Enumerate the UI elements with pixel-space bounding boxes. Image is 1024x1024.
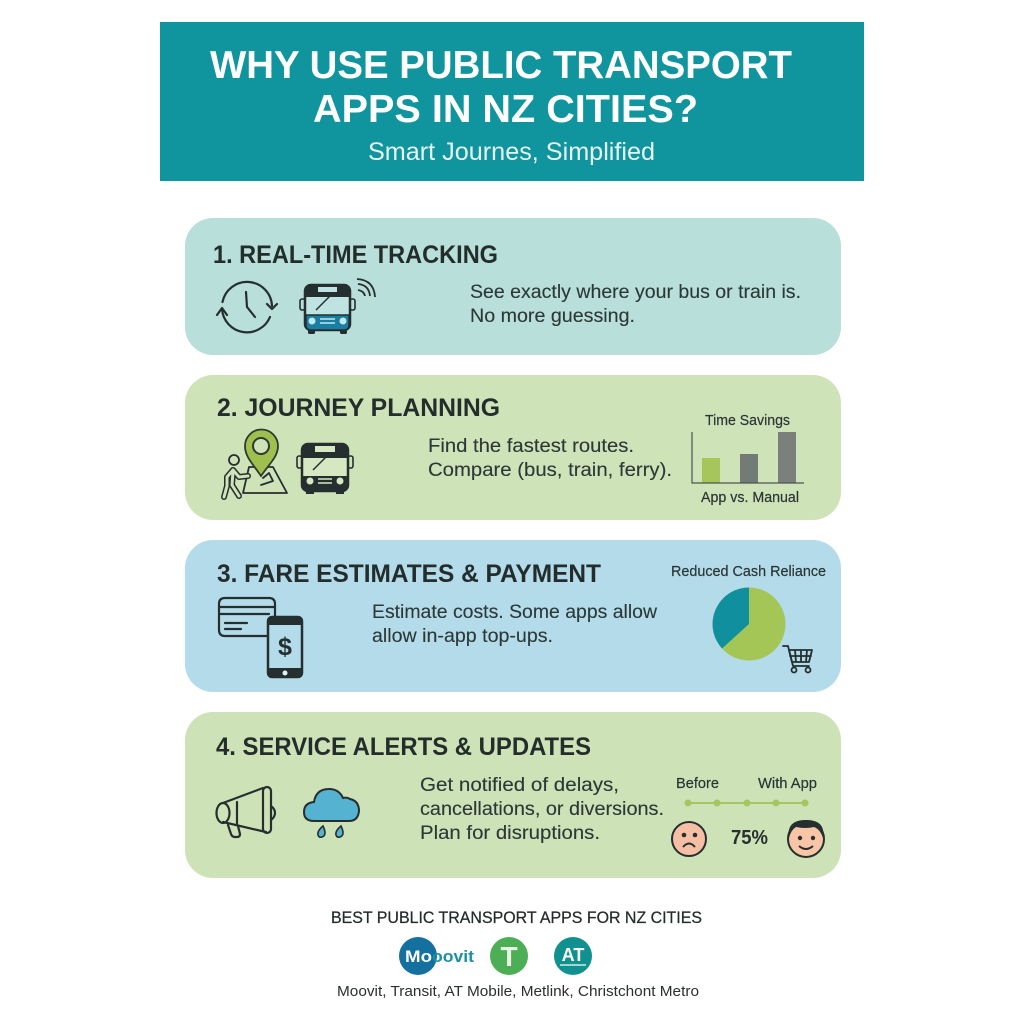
description: cancellations, or diversions.: [420, 799, 664, 820]
panel background: [185, 218, 841, 355]
description: Compare (bus, train, ferry).: [428, 460, 672, 481]
logo: Moovit: Mo: [405, 947, 432, 966]
icon: card and phone: [219, 598, 302, 677]
header background: [160, 22, 864, 181]
bar chart: time savings: App vs. Manual: [701, 490, 799, 506]
logo: AT Mobile: [554, 937, 592, 975]
bar chart: time savings: [692, 413, 804, 506]
icon: card and phone: $: [278, 633, 292, 661]
footer: [331, 909, 702, 1000]
header banner: [160, 22, 864, 181]
before and after comparison: Before: [676, 776, 719, 792]
app list: Moovit, Transit, AT Mobile, Metlink, Christchont Metro: [337, 983, 699, 1000]
title: WHY USE PUBLIC TRANSPORT: [210, 44, 792, 87]
description: Find the fastest routes.: [428, 436, 634, 457]
logo: Transit: [490, 937, 528, 975]
heading: 1. REAL-TIME TRACKING: [213, 241, 498, 269]
panel: journey planning: [185, 375, 841, 520]
icon: clock with arrows: [217, 282, 277, 332]
bar chart: time savings: Time Savings: [705, 413, 790, 429]
panel background: [185, 375, 841, 520]
title: [210, 44, 792, 131]
subtitle: Smart Journes, Simplified: [368, 138, 655, 166]
description: allow in-app top-ups.: [372, 626, 553, 647]
pie chart: reduced cash reliance: [671, 564, 826, 660]
logo: AT Mobile: AT: [562, 945, 584, 965]
logo: Moovit: [399, 937, 474, 975]
heading: 4. SERVICE ALERTS & UPDATES: [216, 733, 591, 761]
icon: bus with signal: [300, 279, 375, 334]
logo: Transit: T: [500, 941, 518, 972]
logo: Moovit: oovit: [432, 947, 474, 966]
description: No more guessing.: [470, 306, 635, 327]
icon: shopping cart: [783, 646, 812, 672]
heading: 3. FARE ESTIMATES & PAYMENT: [217, 560, 601, 588]
description: Plan for disruptions.: [420, 823, 600, 844]
panel background: [185, 712, 841, 878]
icon: bus: [297, 444, 353, 494]
description: Estimate costs. Some apps allow: [372, 602, 657, 623]
before and after comparison: 75%: [731, 827, 768, 849]
icon: walker, map and pin: [224, 430, 287, 497]
pie chart: reduced cash reliance: Reduced Cash Reliance: [671, 564, 826, 580]
before and after comparison: [672, 776, 824, 857]
panel: real-time tracking: [185, 218, 841, 355]
heading: 2. JOURNEY PLANNING: [217, 394, 500, 422]
panel: service alerts and updates: [185, 712, 841, 878]
icon: megaphone: [216, 787, 275, 837]
description: Get notified of delays,: [420, 775, 619, 796]
footer heading: BEST PUBLIC TRANSPORT APPS FOR NZ CITIES: [331, 909, 702, 927]
icon: rain cloud: [304, 789, 359, 837]
title: APPS IN NZ CITIES?: [313, 88, 698, 131]
panel: fare estimates and payment: [185, 540, 841, 692]
before and after comparison: With App: [758, 776, 817, 792]
description: See exactly where your bus or train is.: [470, 282, 801, 303]
panel background: [185, 540, 841, 692]
